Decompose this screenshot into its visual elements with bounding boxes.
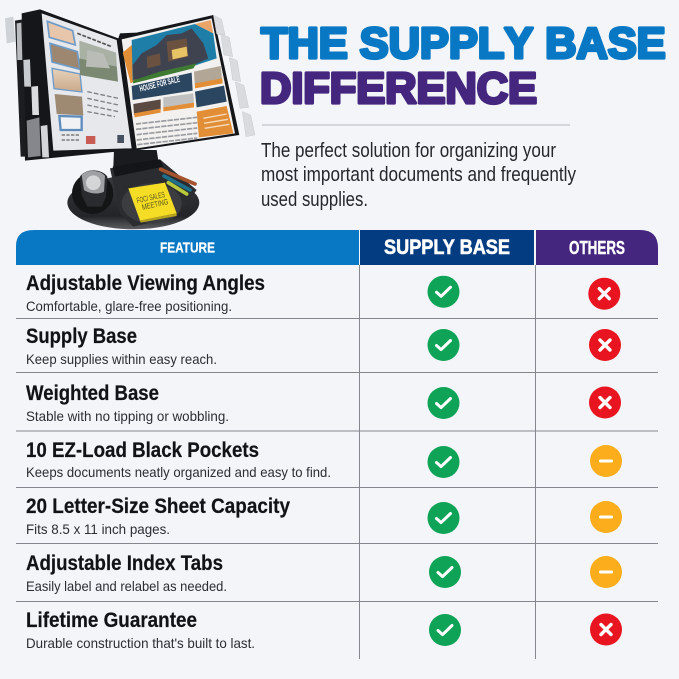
pens in tray [161,169,195,194]
title line: difference: DIFFERENCE [260,65,537,113]
intro paragraph: most important documents and frequently [261,164,576,186]
left page flyer [42,13,132,151]
product photo: desktop document display with supply base [5,9,255,229]
row: weighted base: Weighted Base [26,382,159,405]
row: 20 letter-size sheet capacity: Fits 8.5 x 11 inch pages. [26,521,170,537]
row: weighted base [26,382,621,424]
row: 10 ez-load black pockets: Keeps documents neatly organized and easy to find. [26,464,331,480]
sticky note: FOCI SALES [136,190,166,205]
title line: the supply base: THE SUPPLY BASE [261,20,666,68]
row: adjustable viewing angles: Comfortable, glare-free positioning. [26,298,232,314]
row: 20 letter-size sheet capacity [26,495,622,537]
header: supply base [360,230,534,265]
row: adjustable index tabs: Adjustable Index Tabs [26,552,223,575]
table grid lines [16,265,658,659]
row: lifetime guarantee: Durable construction that's built to last. [26,635,255,651]
row: adjustable viewing angles [26,272,620,314]
header: supply base: SUPPLY BASE [384,236,510,259]
stand neck [113,150,159,167]
row: lifetime guarantee [26,609,622,651]
row: 10 ez-load black pockets: 10 EZ-Load Black Pockets [26,439,259,462]
stapler [80,170,107,207]
row: 20 letter-size sheet capacity: 20 Letter-Size Sheet Capacity [26,495,290,518]
right page flyer: house for sale [122,18,235,148]
title [260,20,666,113]
row: 10 ez-load black pockets [26,439,622,480]
sticky note: MEETING [141,197,169,212]
row: supply base [26,325,621,367]
row: supply base: Supply Base [26,325,137,348]
row: lifetime guarantee: Lifetime Guarantee [26,609,197,632]
header: others: OTHERS [569,238,625,258]
row: adjustable index tabs: Easily label and relabel as needed. [26,578,227,594]
row: supply base: Keep supplies within easy reach. [26,351,217,367]
header: feature: FEATURE [160,240,215,256]
row: weighted base: Stable with no tipping or wobbling. [26,408,229,424]
row: adjustable viewing angles: Adjustable Viewing Angles [26,272,265,295]
intro paragraph: used supplies. [261,189,368,211]
row: adjustable index tabs [26,552,622,594]
header: feature [16,230,359,265]
header: others [536,230,658,265]
back pockets and left index tabs [5,9,239,161]
table header [16,230,658,265]
round supply base [67,159,199,229]
right page flyer: house for sale: HOUSE FOR SALE [138,74,181,94]
intro paragraph: The perfect solution for organizing your [261,140,556,162]
intro paragraph [261,140,576,211]
sticky note [128,183,177,223]
right index tabs [213,15,255,137]
